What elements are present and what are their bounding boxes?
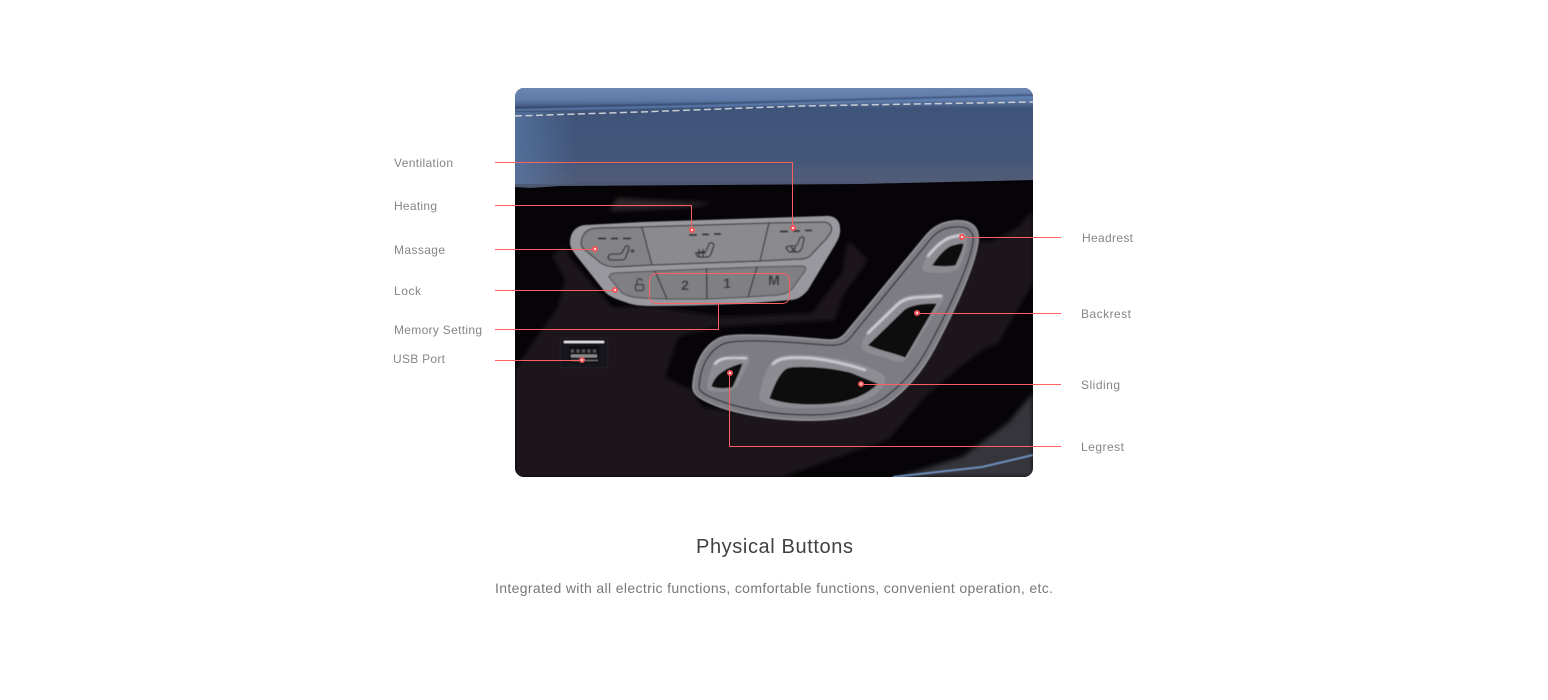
infographic canvas — [394, 88, 1133, 596]
labels on memory buttons: 2 — [681, 277, 689, 293]
button row: lock and memory — [609, 266, 806, 299]
upper button plate: M — [768, 272, 780, 288]
seat shaped control plate — [693, 221, 978, 420]
callout: backrest — [915, 307, 1132, 321]
callout: usb port — [393, 352, 584, 366]
callout: lock: Lock — [394, 284, 422, 298]
callout: legrest: Legrest — [1081, 440, 1125, 454]
callout: backrest: Backrest — [1081, 307, 1132, 321]
icon: usb port — [560, 338, 608, 368]
button: ventilation — [760, 222, 832, 261]
callout: massage: Massage — [394, 243, 445, 257]
callout: ventilation — [394, 156, 795, 230]
photo: seat control door panel — [515, 88, 1033, 477]
callout: heating — [394, 199, 694, 232]
callout: headrest: Headrest — [1082, 231, 1134, 245]
description text: Integrated with all electric functions, comfortable functions, convenient operation, etc. — [495, 580, 1053, 596]
callout: sliding — [859, 378, 1120, 392]
callout: heating: Heating — [394, 199, 437, 213]
switch: backrest — [862, 294, 943, 361]
blue leather upper trim — [515, 88, 1033, 188]
switch: legrest — [708, 355, 748, 391]
callout: headrest — [960, 231, 1134, 245]
dark lower door panel background — [515, 198, 1033, 477]
upper button plate: 1 — [723, 275, 731, 291]
button: massage — [581, 227, 652, 267]
switch: sliding — [760, 355, 884, 407]
icons on buttons — [598, 230, 812, 290]
callout: legrest — [728, 371, 1125, 454]
blue trim reflection at bottom right — [893, 455, 1033, 477]
callout: lock — [394, 284, 617, 298]
callout: massage — [394, 243, 597, 257]
callout: memory setting: Memory Setting — [394, 323, 482, 337]
upper button plate — [570, 216, 840, 306]
switch: headrest — [923, 234, 967, 272]
callout: sliding: Sliding — [1081, 378, 1120, 392]
callout: ventilation: Ventilation — [394, 156, 453, 170]
button: heating — [642, 223, 769, 265]
callout: usb port: USB Port — [393, 352, 446, 366]
callout: memory setting — [394, 274, 790, 337]
heading: Physical Buttons — [696, 536, 853, 558]
